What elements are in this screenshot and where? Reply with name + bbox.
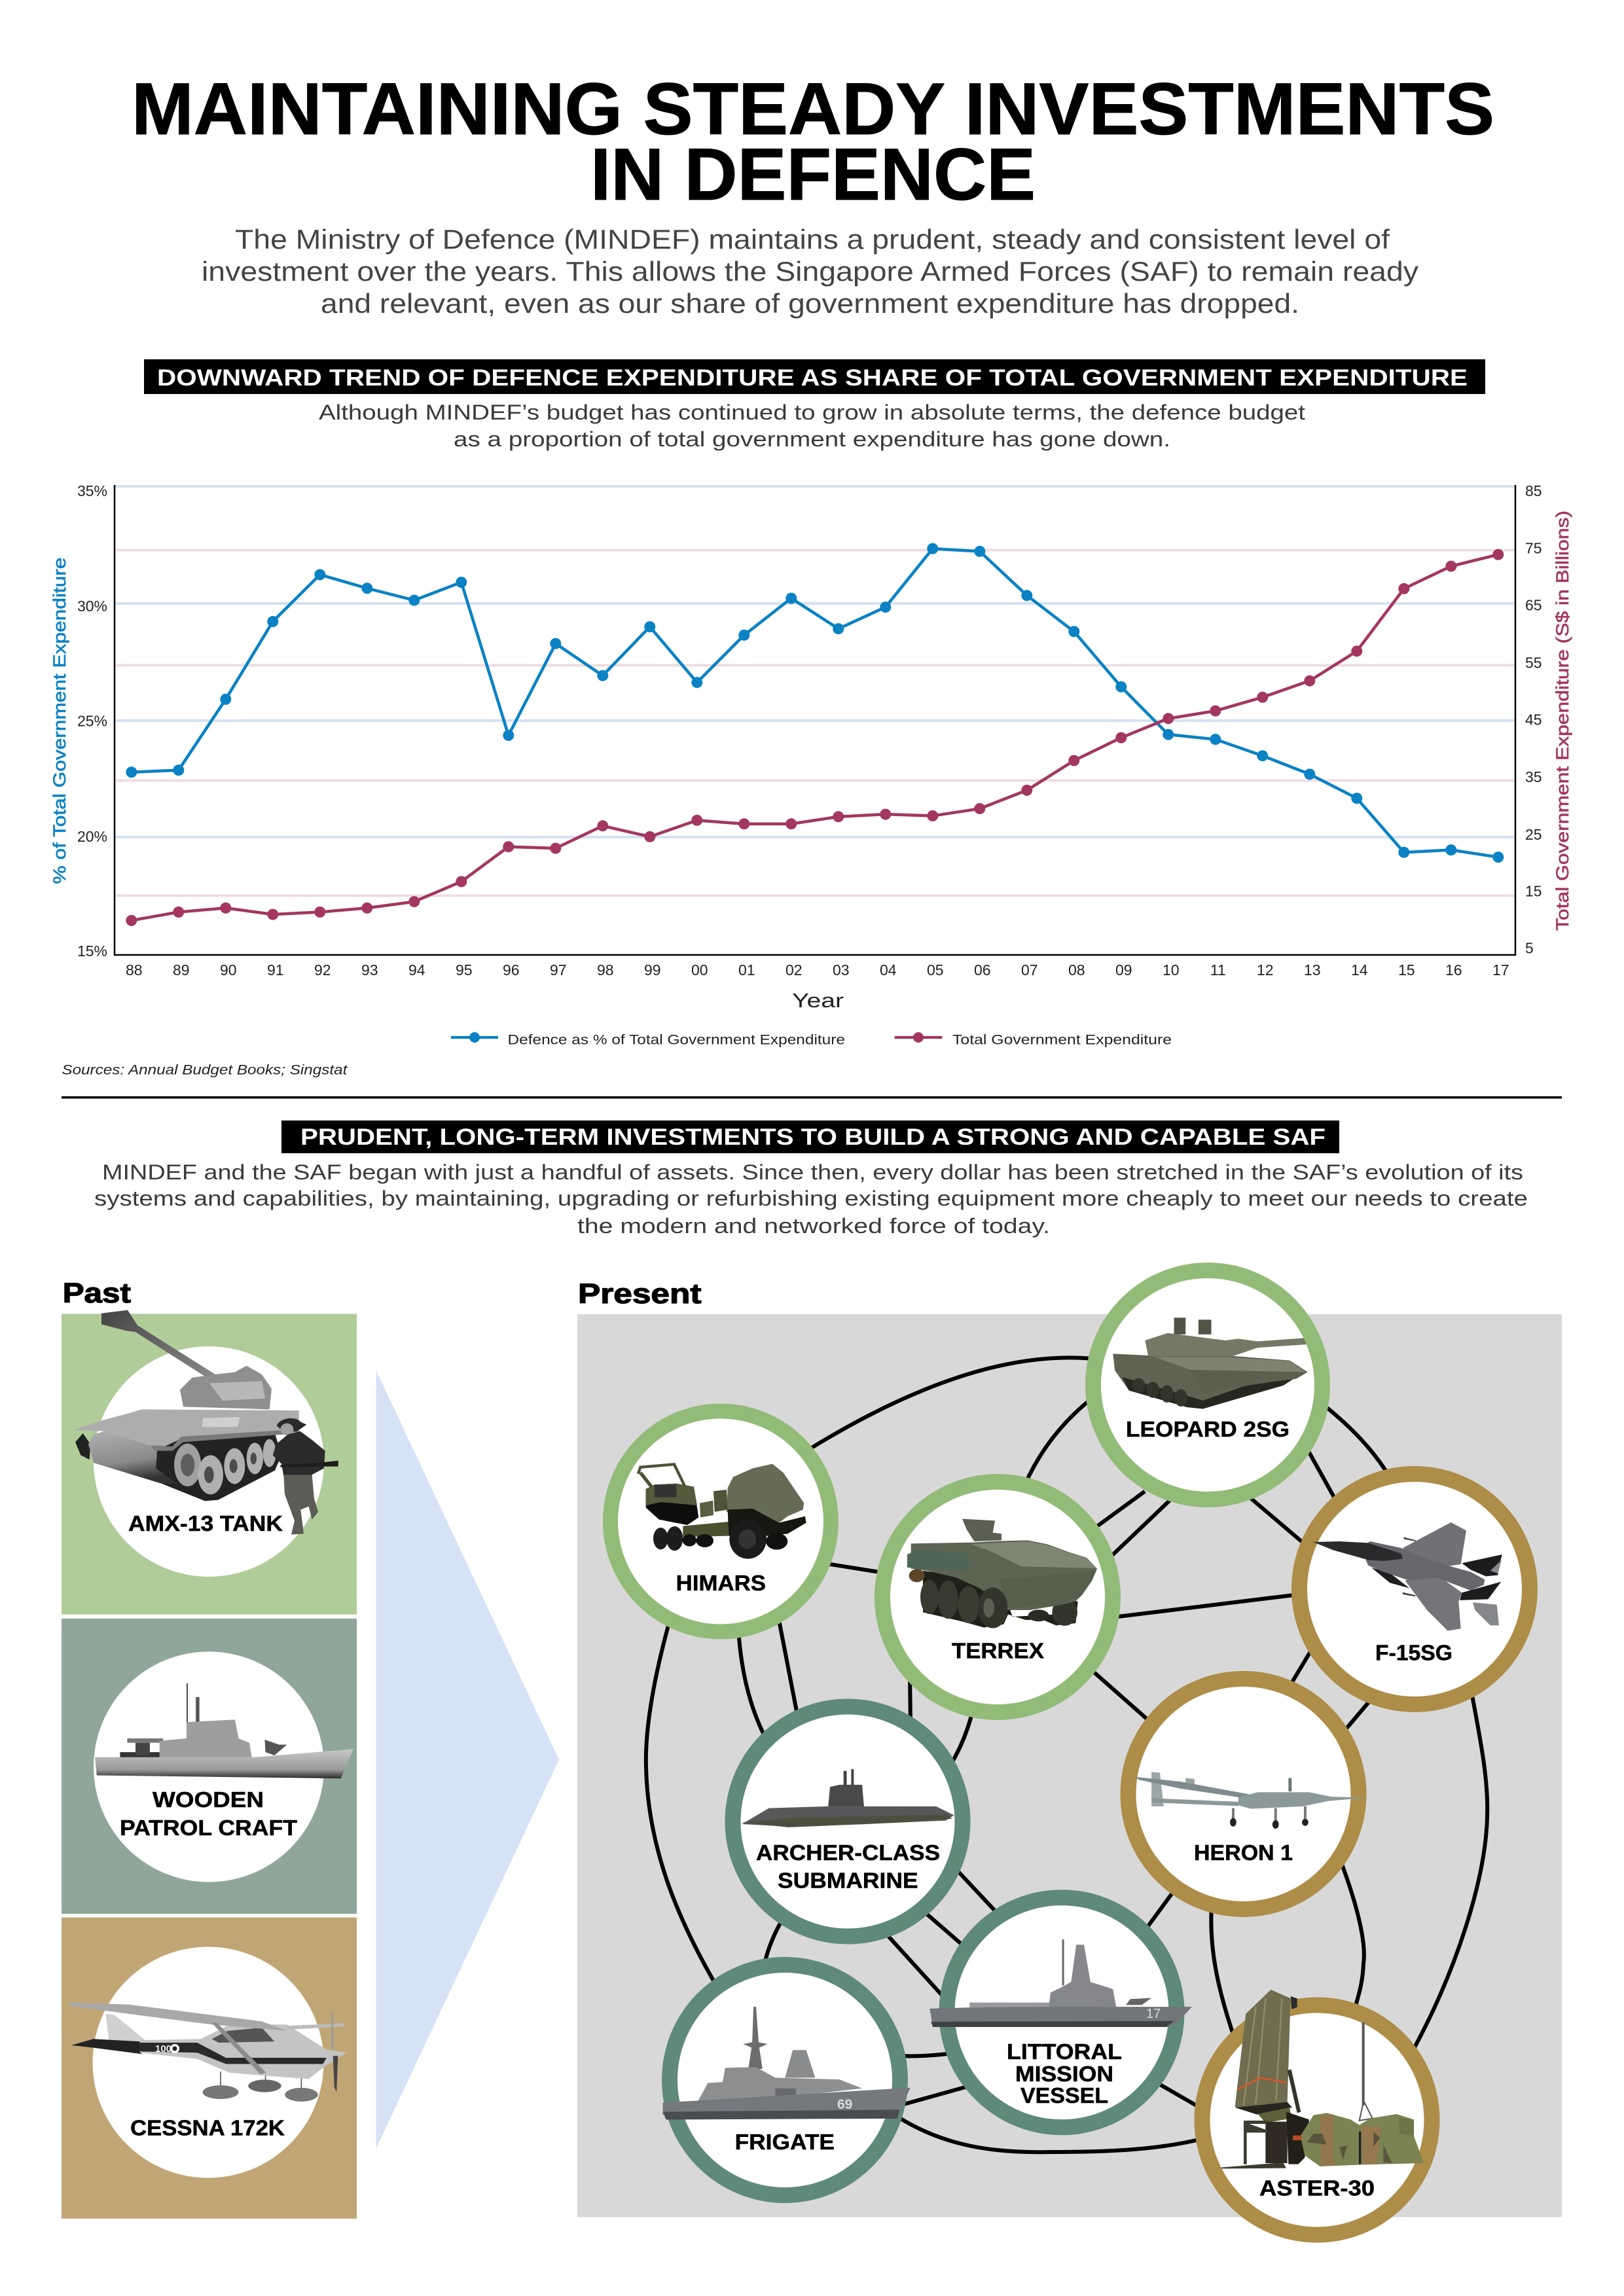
legend [451, 1032, 1172, 1048]
panel: present [577, 1270, 1562, 2234]
left axis labels: 20% [77, 828, 107, 845]
line chart [50, 482, 1572, 1012]
icon: tank [73, 1310, 338, 1535]
x axis labels: 97 [550, 961, 567, 978]
right axis labels: 45 [1525, 711, 1542, 728]
heading: present: Present [578, 1278, 702, 1310]
label [1007, 2039, 1122, 2108]
x axis labels: 11 [1210, 961, 1226, 978]
label: SUBMARINE [778, 1868, 918, 1893]
heading: prudent investments [281, 1121, 1339, 1153]
node: HIMARS [610, 1411, 831, 1632]
panel: past [62, 1310, 357, 2219]
right axis title: Total Government Expenditure (S$ in Billions) [1553, 511, 1572, 931]
label: HIMARS [676, 1571, 766, 1595]
x axis labels: 12 [1257, 961, 1274, 978]
right axis labels: 25 [1525, 826, 1542, 843]
left axis labels: 30% [77, 598, 107, 615]
legend: Defence as % of Total Government Expenditure [508, 1033, 845, 1048]
label: HERON 1 [1194, 1840, 1293, 1865]
x axis labels: 98 [597, 961, 614, 978]
label: ASTER-30 [1259, 2176, 1375, 2200]
right axis labels: 5 [1525, 940, 1534, 957]
label: AMX-13 TANK [128, 1511, 283, 1535]
title: IN DEFENCE [590, 134, 1036, 215]
node: Terrex [882, 1482, 1113, 1712]
heading: downward trend: DOWNWARD TREND OF DEFENCE EXPENDITURE AS SHARE OF TOTAL GOVERNMENT EXPENDITURE [157, 365, 1468, 391]
x axis labels: 07 [1021, 961, 1038, 978]
label: VESSEL [1020, 2083, 1108, 2108]
icon: Leopard tank [1113, 1318, 1308, 1409]
x axis labels: 05 [927, 961, 944, 978]
x axis labels: 94 [408, 961, 425, 978]
x axis labels: 08 [1068, 961, 1085, 978]
left axis title: % of Total Government Expenditure [50, 558, 69, 884]
x axis labels: 91 [267, 961, 284, 978]
x axis labels [126, 961, 1509, 978]
right axis labels: 65 [1525, 597, 1542, 614]
right axis labels: 15 [1525, 883, 1542, 900]
label: MISSION [1015, 2062, 1113, 2086]
heading: prudent investments: PRUDENT, LONG-TERM INVESTMENTS TO BUILD A STRONG AND CAPABLE SAF [300, 1124, 1326, 1150]
x axis labels: 02 [785, 961, 803, 978]
icon: HIMARS launcher [638, 1464, 806, 1559]
label: CESSNA 172K [130, 2116, 285, 2140]
x axis labels: 06 [974, 961, 991, 978]
legend: Total Government Expenditure [952, 1033, 1172, 1048]
tail number: 100 [155, 2043, 171, 2054]
label [756, 1840, 940, 1893]
node: Frigate [663, 1965, 911, 2195]
x axis labels: 16 [1445, 961, 1462, 978]
icon: littoral mission vessel [929, 1939, 1192, 2027]
x axis labels: 96 [503, 961, 520, 978]
label: WOODEN [153, 1787, 264, 1812]
heading: past: Past [63, 1278, 131, 1309]
sources note: Sources: Annual Budget Books; Singstat [62, 1063, 348, 1078]
label: FRIGATE [735, 2130, 835, 2154]
label: LEOPARD 2SG [1126, 1417, 1290, 1441]
hull number: 17 [1146, 2007, 1161, 2021]
node: Archer-class submarine [733, 1707, 962, 1936]
arrow: past to present [376, 1371, 559, 2149]
series: total government expenditure [132, 554, 1498, 920]
tile: Cessna 172K [62, 1918, 357, 2219]
right axis labels: 85 [1525, 482, 1542, 499]
x axis labels: 15 [1398, 961, 1415, 978]
left axis labels [77, 482, 107, 960]
x axis labels: 89 [173, 961, 190, 978]
title [132, 68, 1494, 215]
tile: wooden patrol craft [62, 1619, 357, 1914]
right axis labels: 55 [1525, 655, 1542, 672]
icon: patrol craft [95, 1683, 353, 1778]
icon: Terrex vehicle [907, 1519, 1097, 1628]
label: ARCHER-CLASS [756, 1840, 940, 1865]
right axis labels [1525, 482, 1542, 957]
section text [94, 1160, 1528, 1238]
hull number: 69 [837, 2097, 852, 2112]
x axis labels: 99 [644, 961, 661, 978]
label [120, 1787, 297, 1840]
x axis labels: 04 [880, 961, 897, 978]
title: MAINTAINING STEADY INVESTMENTS [132, 68, 1494, 150]
section text: systems and capabilities, by maintaining, upgrading or refurbishing existing equipment more cheaply to meet our needs to create [94, 1187, 1528, 1210]
section text: the modern and networked force of today. [577, 1214, 1050, 1238]
node: Littoral mission vessel [929, 1897, 1192, 2127]
node: Aster-30 [1202, 1990, 1432, 2234]
intro text: investment over the years. This allows the Singapore Armed Forces (SAF) to remain ready [202, 256, 1418, 287]
section text: MINDEF and the SAF began with just a handful of assets. Since then, every dollar has been stretched in the SAF’s evolution of its [102, 1160, 1523, 1184]
chart subtext [319, 401, 1305, 451]
right axis labels: 75 [1525, 539, 1542, 556]
x axis labels: 17 [1492, 961, 1509, 978]
left axis labels: 15% [77, 942, 107, 960]
icon: F-15SG fighter [1313, 1522, 1502, 1631]
label: PATROL CRAFT [120, 1816, 297, 1840]
icon: frigate [663, 2007, 911, 2119]
x axis labels: 92 [314, 961, 331, 978]
series: defence share [132, 548, 1498, 857]
icon: Heron UAV [1136, 1772, 1368, 1829]
label: F-15SG [1375, 1641, 1453, 1665]
intro text: The Ministry of Defence (MINDEF) maintains a prudent, steady and consistent level of [235, 224, 1390, 255]
x axis title: Year [792, 989, 844, 1012]
right axis labels: 35 [1525, 768, 1542, 785]
x axis labels: 88 [126, 961, 143, 978]
x axis labels: 00 [691, 961, 708, 978]
left axis labels: 25% [77, 712, 107, 729]
label: LITTORAL [1007, 2039, 1122, 2064]
network lines [646, 1357, 1487, 2152]
intro text: and relevant, even as our share of government expenditure has dropped. [321, 288, 1299, 319]
chart subtext: as a proportion of total government expenditure has gone down. [454, 427, 1170, 451]
x axis labels: 01 [738, 961, 755, 978]
chart subtext: Although MINDEF’s budget has continued to grow in absolute terms, the defence budget [319, 401, 1305, 424]
soldier [277, 1418, 306, 1431]
intro text [202, 224, 1418, 319]
icon: submarine [742, 1769, 954, 1827]
x axis labels: 93 [361, 961, 378, 978]
x axis labels: 09 [1115, 961, 1132, 978]
label: TERREX [952, 1639, 1044, 1663]
x axis labels: 90 [220, 961, 237, 978]
tile: AMX-13 tank [62, 1310, 357, 1615]
node: F-15SG [1299, 1474, 1530, 1704]
x axis labels: 14 [1351, 961, 1368, 978]
icon: Aster-30 launcher [1221, 1990, 1424, 2168]
x axis labels: 13 [1304, 961, 1321, 978]
icon: Cessna aircraft [68, 2003, 346, 2102]
x axis labels: 10 [1163, 961, 1180, 978]
x axis labels: 03 [833, 961, 850, 978]
x axis labels: 95 [456, 961, 473, 978]
node: Leopard 2SG [1093, 1270, 1322, 1499]
node: Heron 1 [1128, 1679, 1368, 1909]
left axis labels: 35% [77, 482, 107, 499]
heading: downward trend [144, 359, 1485, 394]
